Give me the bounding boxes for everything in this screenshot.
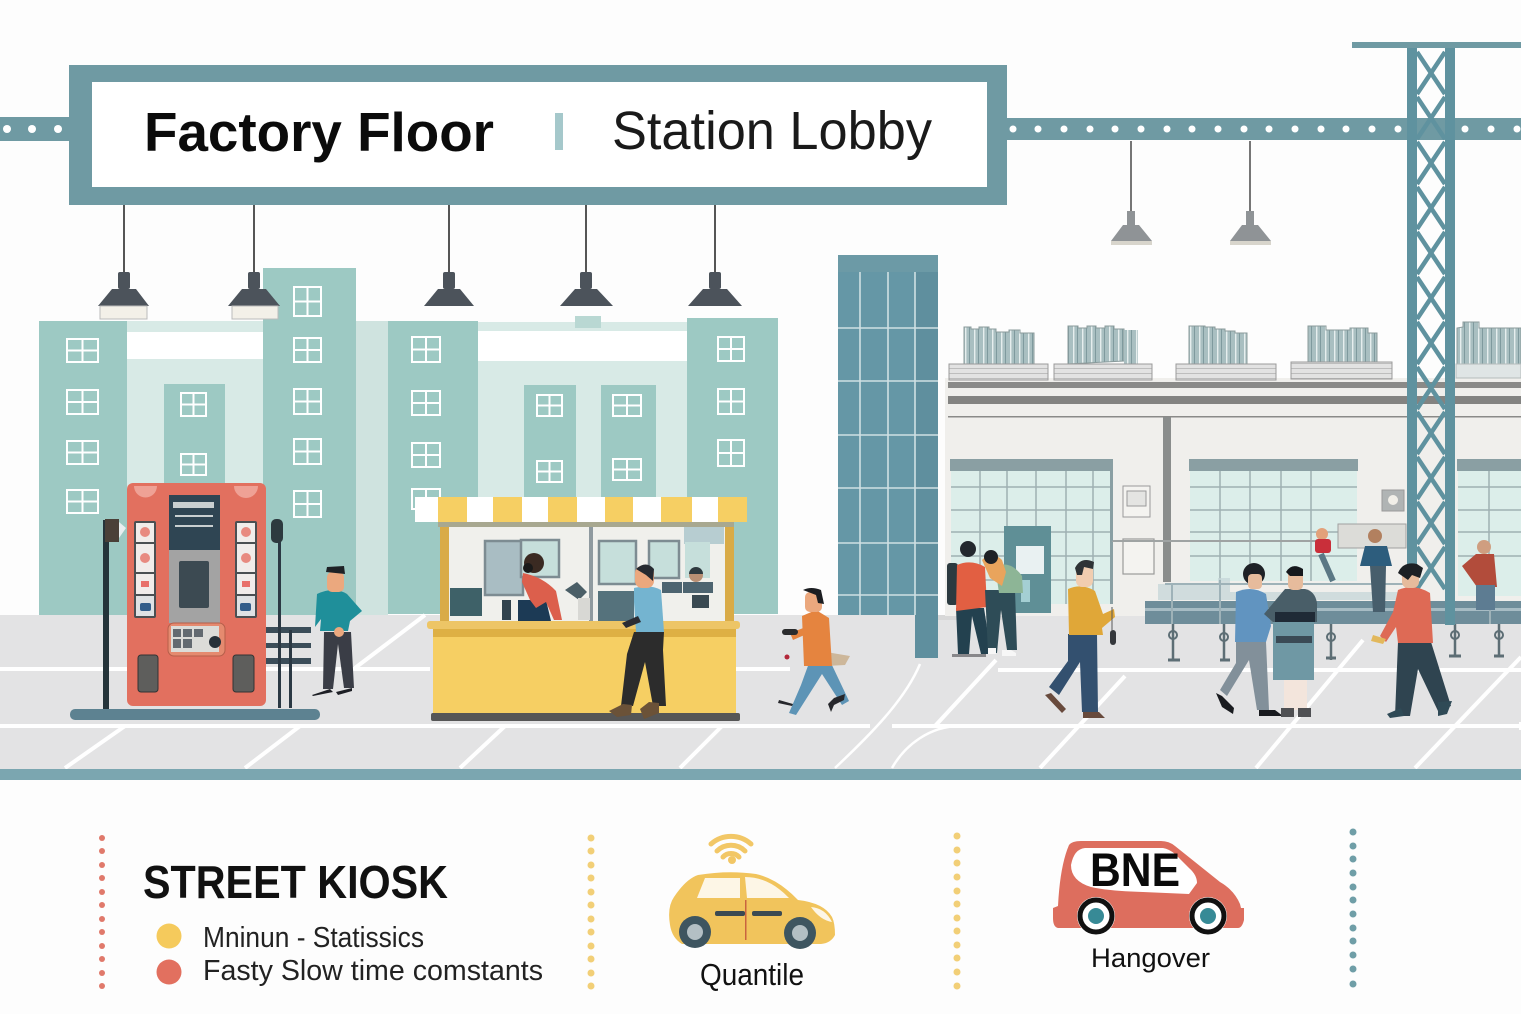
cable hanging lamps: sign row bbox=[98, 205, 742, 319]
sign separator bbox=[555, 113, 563, 150]
person: customer at kiosk bbox=[609, 564, 666, 719]
legend item two: Fasty Slow time comstants bbox=[203, 955, 543, 987]
kiosk worker bbox=[502, 553, 562, 621]
rail: left bbox=[0, 117, 70, 141]
person: man in blue hoodie bbox=[1216, 563, 1283, 716]
food kiosk bbox=[415, 497, 747, 721]
legend: street kiosk bbox=[143, 856, 543, 987]
blue tower block bbox=[838, 255, 938, 658]
person: man with red jacket and backpack bbox=[947, 541, 991, 657]
person: woman in green bbox=[982, 550, 1023, 656]
van lettering: BNE bbox=[1090, 843, 1180, 896]
bullet yellow bbox=[156, 924, 182, 948]
dotted divider teal bbox=[1350, 828, 1356, 988]
steel tower bbox=[1352, 42, 1521, 625]
icon: connected yellow car bbox=[669, 836, 835, 949]
legend heading: STREET KIOSK bbox=[143, 856, 448, 908]
platform base bar bbox=[70, 709, 320, 720]
bullet red bbox=[156, 960, 182, 984]
person: man in red sweater bbox=[1371, 563, 1452, 718]
rail: right bbox=[1007, 118, 1521, 140]
red vending kiosk bbox=[127, 483, 266, 706]
factory windows bbox=[950, 459, 1521, 604]
buildings: right pair bbox=[388, 318, 778, 614]
label: Quantile: Quantile bbox=[700, 957, 804, 992]
title sign bbox=[69, 65, 1007, 205]
counter bbox=[427, 621, 740, 721]
buildings: left pair bbox=[39, 268, 356, 615]
legend item one: Mninun - Statissics bbox=[203, 922, 424, 954]
floor bbox=[0, 615, 1521, 770]
street lamp posts and bench bbox=[103, 519, 311, 709]
keypad bbox=[168, 623, 225, 656]
dotted divider yellow bbox=[588, 834, 594, 990]
person: man in dark coat bbox=[1264, 566, 1317, 717]
icon: BNE van bbox=[1053, 841, 1244, 935]
building windows bbox=[67, 287, 744, 517]
floor edge band bbox=[0, 769, 1521, 780]
right side panel bbox=[235, 521, 257, 618]
title: Factory Floor: Factory Floor bbox=[144, 101, 494, 163]
person: walker in orange bbox=[778, 588, 850, 715]
awning bbox=[415, 497, 747, 527]
wall signs bbox=[1113, 486, 1406, 574]
roof units bbox=[949, 322, 1521, 380]
teal door with notice bbox=[1004, 526, 1051, 613]
background workers bbox=[1315, 528, 1497, 612]
person: teal sweater bbox=[312, 566, 362, 696]
factory building bbox=[945, 378, 1521, 616]
person: man in yellow sweater bbox=[1045, 560, 1116, 718]
panel: left pale backdrop bbox=[127, 316, 687, 615]
title: Station Lobby: Station Lobby bbox=[612, 101, 932, 161]
conveyor machine bbox=[1145, 578, 1521, 660]
pendant lamps: rail bbox=[1111, 141, 1271, 245]
dotted divider red bbox=[99, 835, 105, 989]
shop frames bbox=[485, 540, 710, 595]
dotted divider yellow right bbox=[954, 832, 960, 990]
label: Hangover: Hangover bbox=[1091, 943, 1210, 973]
left side panel bbox=[134, 521, 156, 618]
